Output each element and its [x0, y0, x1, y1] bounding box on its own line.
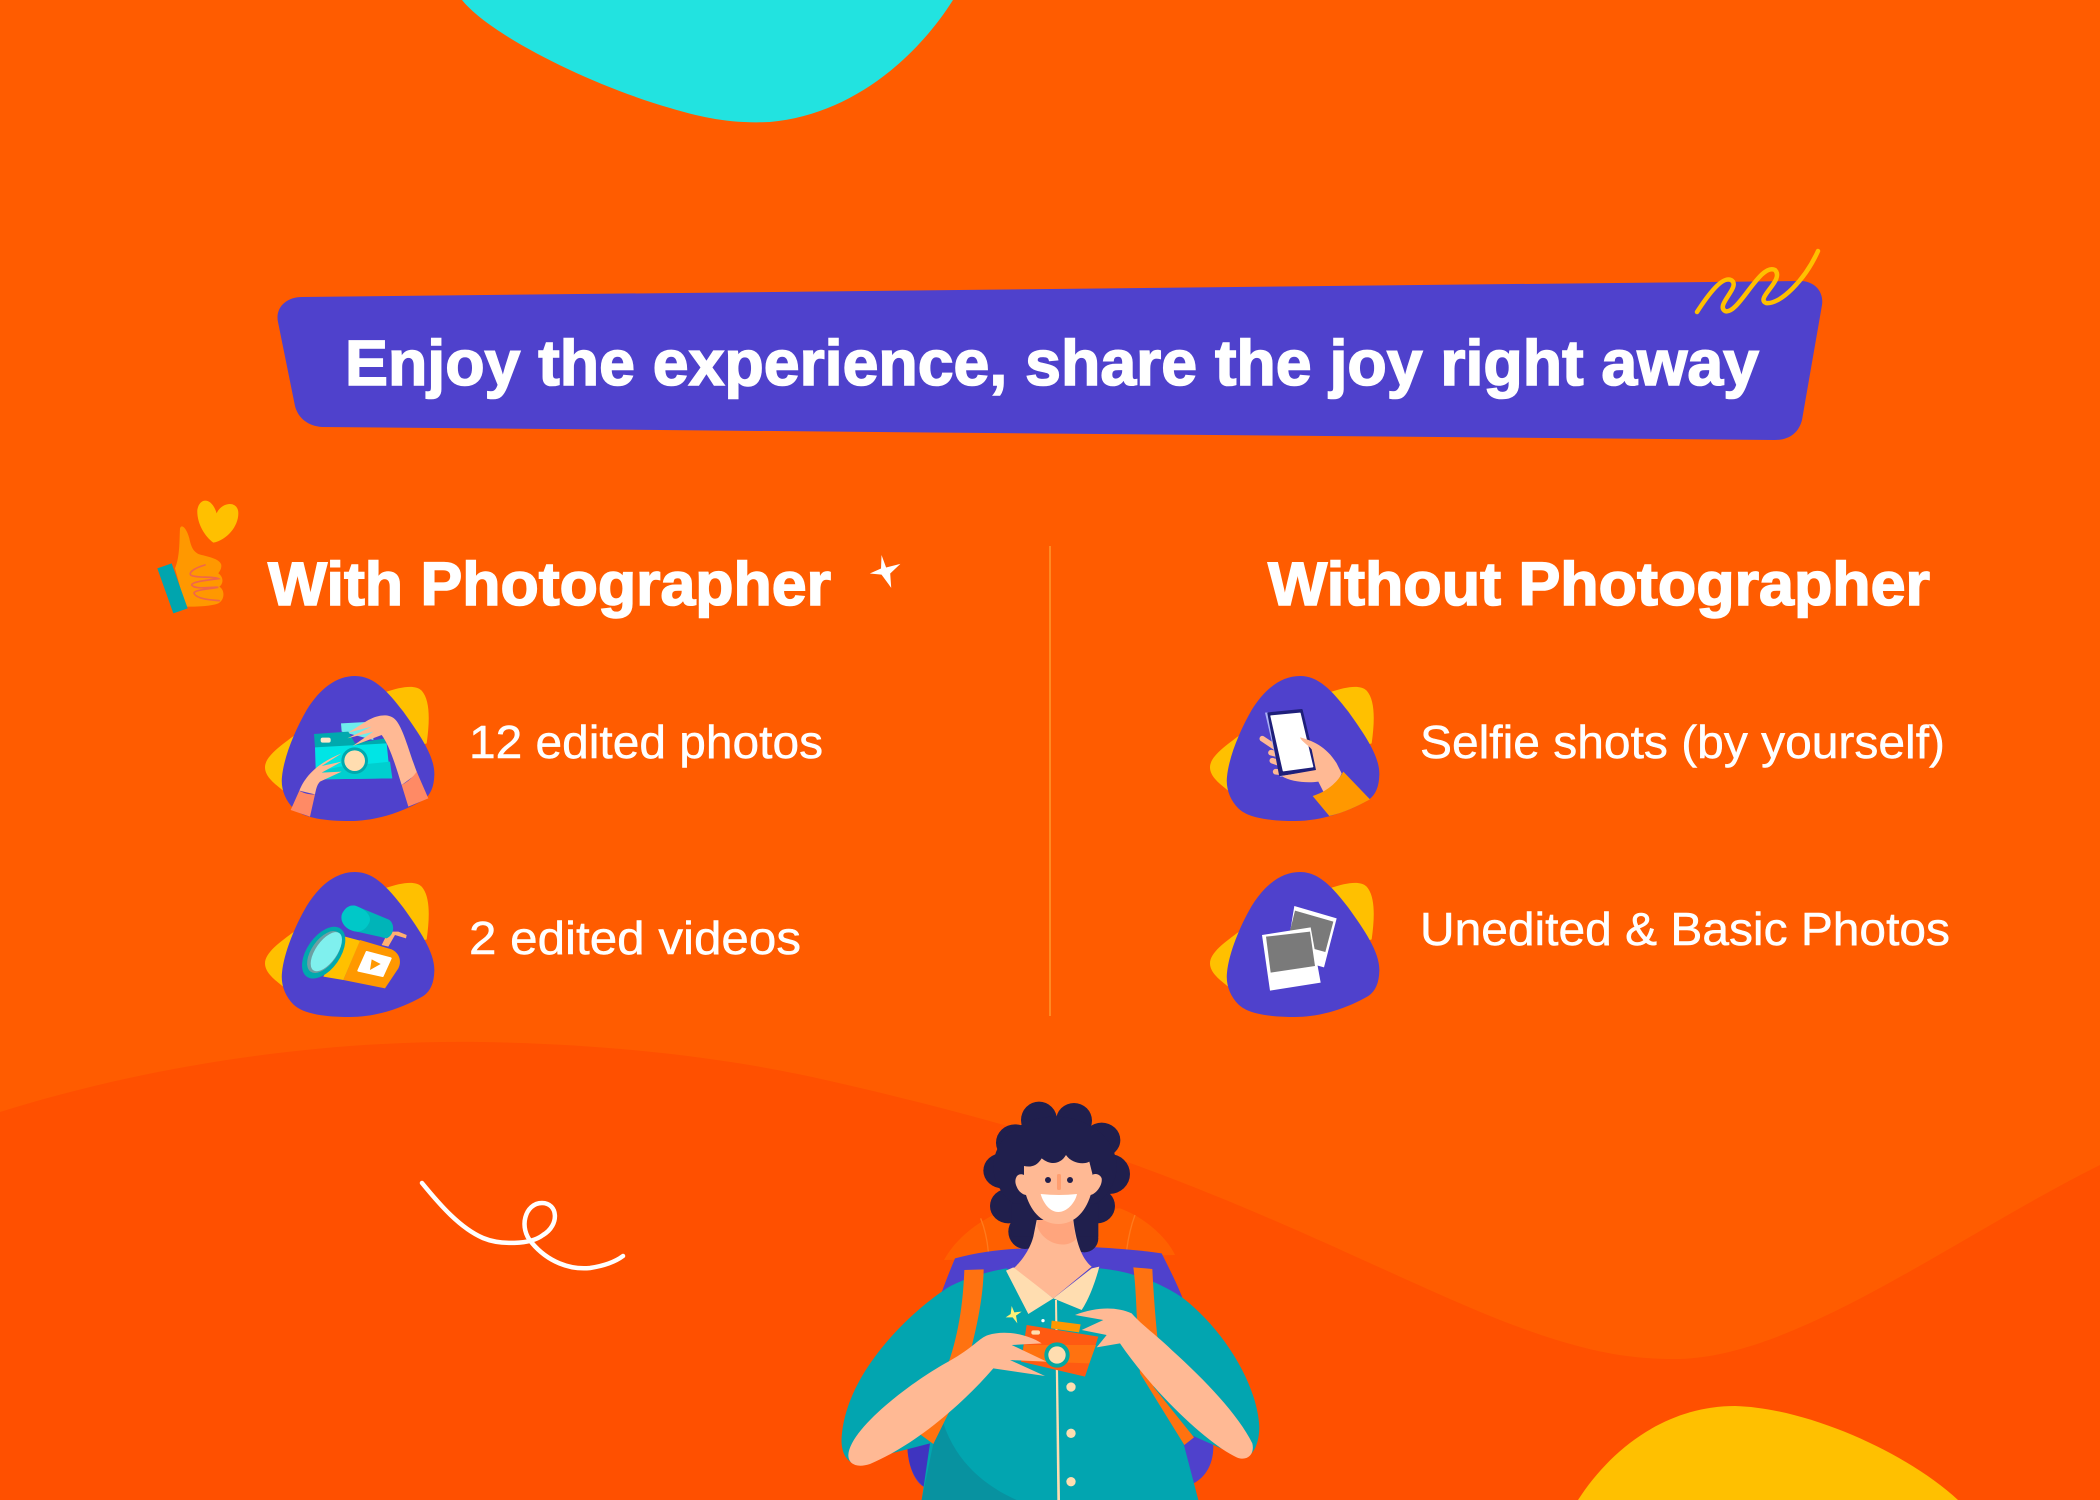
text: selfie shots: Selfie shots (by yourself) — [1420, 716, 1945, 768]
icon: video camera — [265, 872, 434, 1017]
backpack roll — [944, 1208, 1175, 1260]
hair — [983, 1102, 1130, 1252]
background wave — [0, 1042, 2100, 1500]
face — [1015, 1155, 1102, 1224]
title banner — [278, 281, 1822, 440]
right arm — [1075, 1309, 1253, 1459]
teal blob top — [462, 0, 953, 122]
star near heading — [870, 555, 900, 588]
text: 12 edited photos: 12 edited photos — [469, 716, 823, 768]
title: Enjoy the experience, share the joy right away — [345, 327, 1759, 399]
backpack straps — [921, 1267, 1194, 1445]
icon: polaroid photos — [1210, 872, 1379, 1017]
neck — [1013, 1220, 1092, 1298]
text: unedited photos: Unedited & Basic Photos — [1420, 903, 1950, 955]
yellow blob bottom right — [1578, 1406, 1958, 1500]
heading: without photographer: Without Photographer — [1268, 550, 1930, 618]
shirt placket and buttons — [1055, 1300, 1076, 1500]
yellow scribble on banner — [1697, 251, 1818, 312]
heading: with photographer: With Photographer — [268, 550, 831, 618]
collar — [1006, 1267, 1099, 1314]
backpack — [907, 1247, 1213, 1488]
icon: thumbs up with heart — [157, 501, 238, 613]
camera — [1021, 1321, 1098, 1377]
text: 2 edited videos: 2 edited videos — [469, 912, 801, 964]
sparkle — [1006, 1306, 1045, 1323]
shirt — [842, 1268, 1259, 1500]
white squiggle — [422, 1183, 623, 1268]
left arm — [848, 1333, 1047, 1466]
photographer illustration — [842, 1102, 1259, 1500]
camera lens — [1044, 1342, 1070, 1368]
icon: hand holding phone — [1210, 676, 1379, 821]
icon: hands holding camera — [265, 676, 434, 821]
center divider — [1049, 546, 1051, 1016]
